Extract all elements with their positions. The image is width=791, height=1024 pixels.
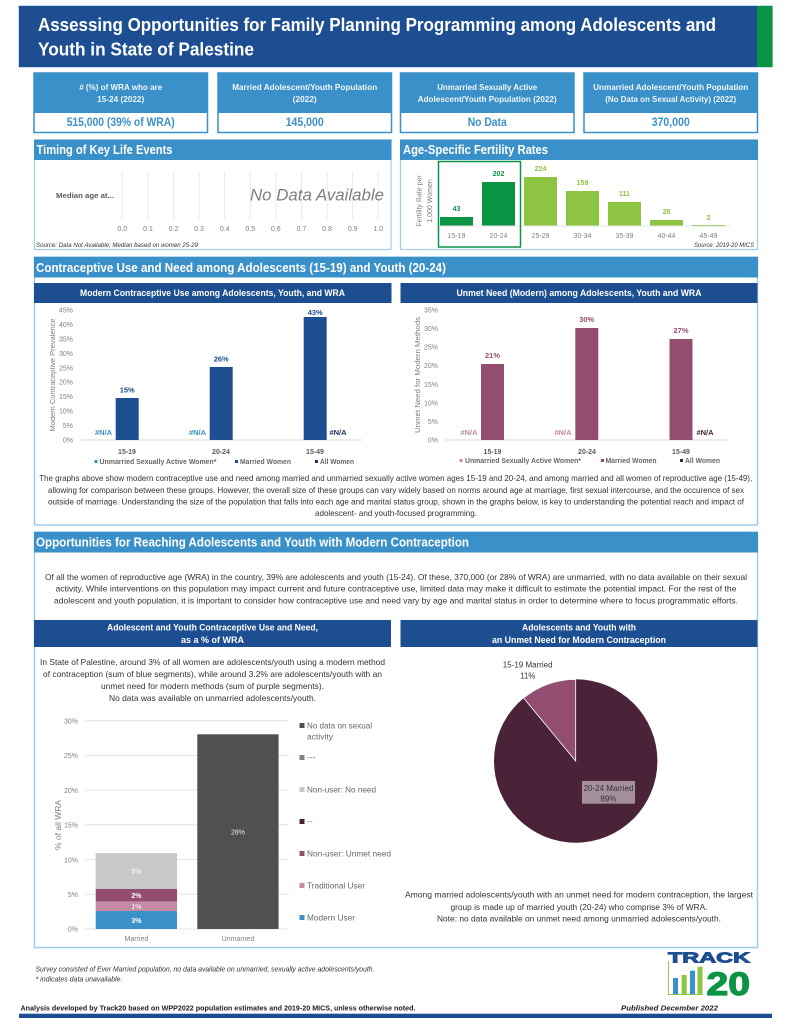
legend: stacked bar [300, 720, 391, 922]
bar chart: unmet need: 30% [579, 315, 595, 324]
chart header: unmet need for modern contraception: an Unmet Need for Modern Contraception [492, 635, 666, 645]
stacked bar chart: % of all WRA: 5% [131, 868, 142, 876]
bar chart: unmet need: 0% [428, 438, 438, 444]
bar chart: unmet need: 15% [424, 382, 438, 389]
bar chart: modern contraceptive use: 15-19 [118, 449, 136, 456]
bar chart: modern contraceptive use: #N/A [189, 428, 207, 437]
text block: opportunities intro: activity. While interventions on this population may impact current and future contraceptive use, limited data may make it difficult to estimate the potential impact. For the rest of the [56, 584, 737, 594]
text block: opportunities intro [45, 572, 747, 606]
stat card: unmarried no data: (No Data on Sexual Activity) (2022) [605, 95, 736, 104]
bar chart: unmet need: 15-49 [672, 449, 690, 456]
bar chart: fertility rates: 202 [493, 171, 504, 178]
text block: graph explanation: outside of marriage. Understanding the size of the population that falls into each age and marital status group, shown in the graphs below, is key to understanding the potential reach and impact of [48, 496, 745, 506]
empty chart: median age: 0.8 [322, 226, 332, 233]
bar chart: modern contraceptive use: 15% [59, 394, 73, 401]
bar chart: modern contraceptive use: Modern Contraceptive Prevalence [50, 318, 57, 432]
text block: graph explanation [39, 473, 752, 518]
chart header: use and need as % of WRA: Adolescent and Youth Contraceptive Use and Need, [107, 622, 318, 632]
empty chart: median age: 0.5 [245, 226, 255, 233]
empty chart: median age: 0.3 [194, 226, 204, 233]
bar chart: modern contraceptive use: 10% [59, 409, 73, 416]
stat card: WRA 15-24: # (%) of WRA who are [79, 83, 163, 92]
empty chart: median age: 0.4 [220, 226, 230, 233]
heading: timing: Timing of Key Life Events [36, 143, 173, 157]
bar chart: modern contraceptive use: 30% [59, 351, 73, 358]
empty chart: median age: No Data Available [250, 186, 384, 204]
legend: stacked bar: Non-user: Unmet need [307, 848, 391, 858]
text block: graph explanation: adolescent- and youth-focused programming. [315, 508, 477, 518]
stacked bar chart: % of all WRA: Married [125, 936, 148, 943]
stat card: married population: (2022) [293, 95, 317, 104]
pie chart: unmet need by group [494, 660, 657, 843]
bar chart: modern contraceptive use: 15-49 [306, 449, 324, 456]
source line: Analysis developed by Track20 based on WPP2022 population estimates and 2019-20 MICS, unless otherwise noted. [20, 1004, 416, 1012]
text block: graph explanation: The graphs above show modern contraceptive use and need among married and unmarried sexually active women ages 15-19 and 20-24, and among married and all women of reproductive age (15-49), [39, 473, 752, 483]
bar chart: fertility rates: 1,000 Women [427, 179, 434, 223]
icon: Track20 logo: 20 [706, 966, 750, 1002]
legend: stacked bar: No data on sexual [307, 720, 372, 730]
pie chart: unmet need by group: 15-19 Married [503, 660, 553, 670]
bar chart: fertility rates [416, 166, 730, 240]
stat card: unmarried no data: 370,000 [652, 117, 690, 129]
footnotes [36, 966, 375, 984]
bar chart: unmet need: 21% [485, 351, 500, 360]
text block: use and need summary: of contraception (sum of blue segments), while around 3.2% are adolescents/youth with an [43, 669, 382, 679]
pie chart: unmet need by group: 20-24 Married [584, 784, 633, 793]
chart header: modern contraceptive use [34, 283, 392, 303]
stacked bar chart: % of all WRA: % of all WRA [53, 800, 63, 850]
text block: opportunities intro: adolescent and youth population, it is important to consider how contraceptive use and need vary by age and marital status in order to determine where to focus programmatic efforts. [54, 596, 738, 606]
text block: pie summary [405, 890, 754, 924]
stat card: married population [218, 73, 392, 132]
stacked bar chart: % of all WRA: 25% [64, 753, 78, 760]
bar chart: fertility rates: 43 [453, 206, 460, 213]
bar chart: modern contraceptive use: Unmarried Sexually Active Women* [100, 459, 217, 466]
footer bar [19, 1014, 772, 1018]
bar chart: modern contraceptive use [50, 308, 362, 466]
stacked bar chart: % of all WRA: 15% [64, 822, 78, 830]
text block: opportunities intro: Of all the women of reproductive age (WRA) in the country, 39% are adolescents and youth (15-24). Of these, 370,000 (or 28% of WRA) are unmarried, with no data available on their sexual [45, 572, 747, 582]
bar chart: modern contraceptive use: #N/A [95, 428, 113, 437]
chart header: unmet need for modern contraception: Adolescents and Youth with [522, 622, 636, 632]
bar chart: modern contraceptive use: 20% [59, 380, 73, 387]
bar chart: fertility rates: 45-49 [700, 233, 718, 240]
bar chart: modern contraceptive use: 40% [59, 322, 73, 329]
bar chart: fertility rates: 25-29 [532, 233, 550, 240]
stat card: unmarried sexually active [400, 73, 574, 132]
bar chart: fertility rates: Fertility Rate per [416, 175, 424, 227]
stacked bar chart: % of all WRA: 2% [131, 893, 142, 900]
stacked bar chart: % of all WRA: 28% [231, 830, 245, 836]
bar chart: unmet need: 10% [424, 400, 438, 407]
bar chart: unmet need: 15-19 [484, 449, 502, 456]
empty chart: median age: 0.2 [169, 226, 178, 233]
stacked bar chart: % of all WRA: 3% [131, 918, 142, 925]
footnotes: Survey consisted of Ever Married population, no data available on unmarried, sexually active adolescents/youth. [36, 966, 375, 974]
text block: use and need summary: unmet need for modern methods (sum of purple segments). [101, 681, 324, 691]
title banner: Youth in State of Palestine [38, 40, 254, 60]
source note: fertility: Source: 2019-20 MICS [694, 243, 754, 249]
empty chart: median age: 1.0 [373, 226, 383, 233]
bar chart: fertility rates: 28 [663, 209, 670, 216]
legend: stacked bar: --- [307, 752, 316, 762]
icon: Track20 logo [668, 950, 750, 1002]
bar chart: modern contraceptive use: Married Women [240, 459, 291, 466]
pie chart: unmet need by group: 11% [520, 672, 535, 680]
text block: pie summary: group is made up of married youth (20-24) who comprise 3% of WRA. [450, 902, 708, 912]
panel: timing of key life events [34, 140, 392, 250]
empty chart: median age: 0.0 [117, 226, 127, 233]
text block: use and need summary: No data was available on unmarried adolescents/youth. [109, 693, 316, 703]
empty chart: median age: 0.9 [348, 226, 358, 233]
stacked bar chart: % of all WRA: 20% [64, 788, 78, 795]
stat card: unmarried sexually active: No Data [468, 117, 507, 129]
bar chart: unmet need: Married Women [606, 458, 656, 465]
chart header: modern contraceptive use: Modern Contraceptive Use among Adolescents, Youth, and WRA [80, 288, 345, 298]
bar chart: modern contraceptive use: 20-24 [212, 449, 230, 456]
bar chart: fertility rates: 111 [619, 191, 630, 198]
stat card: unmarried sexually active: Unmarried Sexually Active [437, 83, 538, 92]
title banner [18, 6, 772, 68]
bar chart: modern contraceptive use: 5% [63, 423, 73, 430]
bar chart: modern contraceptive use: #N/A [329, 428, 347, 437]
heading: contraceptive use and need: Contraceptive Use and Need among Adolescents (15-19) and Youth (20-24) [36, 261, 446, 275]
stat card: unmarried no data: Unmarried Adolescent/Youth Population [593, 83, 748, 92]
bar chart: unmet need: #N/A [460, 428, 478, 437]
stacked bar chart: % of all WRA: 30% [64, 718, 78, 726]
chart header: use and need as % of WRA: as a % of WRA [181, 635, 245, 645]
bar chart: unmet need: 20% [424, 363, 438, 370]
bar chart: unmet need: 20-24 [578, 449, 596, 456]
bar chart: modern contraceptive use: All Women [320, 459, 354, 466]
bar chart: modern contraceptive use: 43% [308, 308, 323, 317]
pie chart: unmet need by group: 89% [600, 794, 617, 804]
bar chart: unmet need: 25% [424, 345, 438, 352]
legend: stacked bar: Modern User [307, 912, 355, 922]
bar chart: fertility rates: 30-34 [574, 233, 592, 240]
chart header: use and need as % of WRA [34, 620, 391, 647]
stat card: unmarried sexually active: Adolescent/Youth Population (2022) [418, 95, 557, 104]
heading: fertility: Age-Specific Fertility Rates [403, 143, 548, 157]
bar chart: modern contraceptive use: 0% [63, 438, 73, 444]
stacked bar chart: % of all WRA: Unmarried [222, 936, 254, 943]
stat card: WRA 15-24: 15-24 (2022) [97, 95, 144, 104]
stat card: unmarried no data [584, 73, 758, 132]
bar chart: modern contraceptive use: 25% [59, 365, 73, 372]
legend: stacked bar: Non-user: No need [307, 784, 376, 794]
bar chart: unmet need: 27% [673, 326, 689, 335]
text block: use and need summary: In State of Palestine, around 3% of all women are adolescents/youth using a modern method [40, 657, 385, 667]
text block: graph explanation: allowing for comparison between these groups. However, the overall size of these groups can vary widely based on norms around age at marriage, first sexual intercourse, and the occurence of sex [48, 485, 745, 495]
panel: opportunities for reaching adolescents and youth [34, 532, 758, 948]
bar chart: unmet need: #N/A [554, 428, 572, 437]
bar chart: unmet need: 35% [424, 308, 438, 314]
bar chart: unmet need: 5% [428, 419, 438, 426]
stat card: married population: 145,000 [286, 117, 324, 129]
empty chart: median age: 0.7 [297, 226, 306, 233]
bar chart: fertility rates: 2 [707, 215, 711, 222]
publication date: Published December 2022 [621, 1004, 719, 1012]
stat card: WRA 15-24: 515,000 (39% of WRA) [67, 117, 175, 129]
text block: pie summary: Note: no data available on unmet need among unmarried adolescents/youth. [437, 914, 721, 924]
bar chart: fertility rates: 159 [577, 180, 588, 187]
stacked bar chart: % of all WRA: 0% [68, 927, 78, 934]
footnotes: * indicates data unavailable. [36, 976, 123, 984]
bar chart: modern contraceptive use: 15% [120, 386, 135, 394]
stat card: WRA 15-24 [34, 73, 208, 132]
bar chart: modern contraceptive use: 45% [59, 308, 73, 314]
chart header: unmet need [400, 283, 758, 303]
chart header: unmet need for modern contraception [400, 620, 758, 647]
icon: Track20 logo: TRACK [668, 950, 750, 966]
text block: use and need summary [40, 657, 385, 703]
bar chart: modern contraceptive use: 35% [59, 336, 73, 343]
title banner: Assessing Opportunities for Family Planning Programming among Adolescents and [38, 15, 716, 35]
bar chart: unmet need: 30% [424, 326, 438, 333]
bar chart: modern contraceptive use: 26% [214, 354, 229, 364]
stat card: married population: Married Adolescent/Youth Population [232, 83, 377, 92]
bar chart: unmet need [415, 308, 727, 465]
chart header: unmet need: Unmet Need (Modern) among Adolescents, Youth and WRA [456, 288, 702, 298]
stacked bar chart: % of all WRA [53, 718, 391, 943]
stacked bar chart: % of all WRA: 10% [64, 857, 78, 864]
stacked bar chart: % of all WRA: 5% [68, 892, 78, 899]
empty chart: median age [56, 172, 384, 233]
bar chart: fertility rates: 35-39 [616, 233, 634, 240]
legend: stacked bar: Traditional User [307, 880, 365, 890]
empty chart: median age: Median age at... [56, 191, 114, 200]
text block: pie summary: Among married adolescents/youth with an unmet need for modern contraception, the largest [405, 890, 754, 900]
bar chart: unmet need: Unmarried Sexually Active Women* [465, 458, 581, 465]
empty chart: median age: 0.1 [143, 226, 153, 233]
heading: opportunities: Opportunities for Reaching Adolescents and Youth with Modern Contraception [36, 536, 469, 550]
stacked bar chart: % of all WRA: 1% [131, 904, 141, 911]
bar chart: unmet need: #N/A [696, 428, 714, 437]
empty chart: median age: 0.6 [271, 226, 281, 233]
highlight box: ages 15-24 [438, 162, 520, 247]
bar chart: fertility rates: 224 [535, 166, 546, 173]
source note: timing: Source: Data Not Available; Median based on women 25-29 [36, 243, 199, 249]
bar chart: fertility rates: 40-44 [658, 233, 676, 240]
bar chart: fertility rates: 20-24 [490, 233, 508, 240]
legend: stacked bar: -- [307, 816, 313, 826]
legend: stacked bar: activity [307, 732, 334, 742]
bar chart: fertility rates: 15-19 [448, 233, 466, 240]
bar chart: unmet need: Unmet Need for Modern Methods [415, 316, 422, 433]
panel: age-specific fertility rates [400, 140, 758, 250]
bar chart: unmet need: All Women [685, 458, 720, 465]
panel: contraceptive use and need [34, 257, 758, 525]
